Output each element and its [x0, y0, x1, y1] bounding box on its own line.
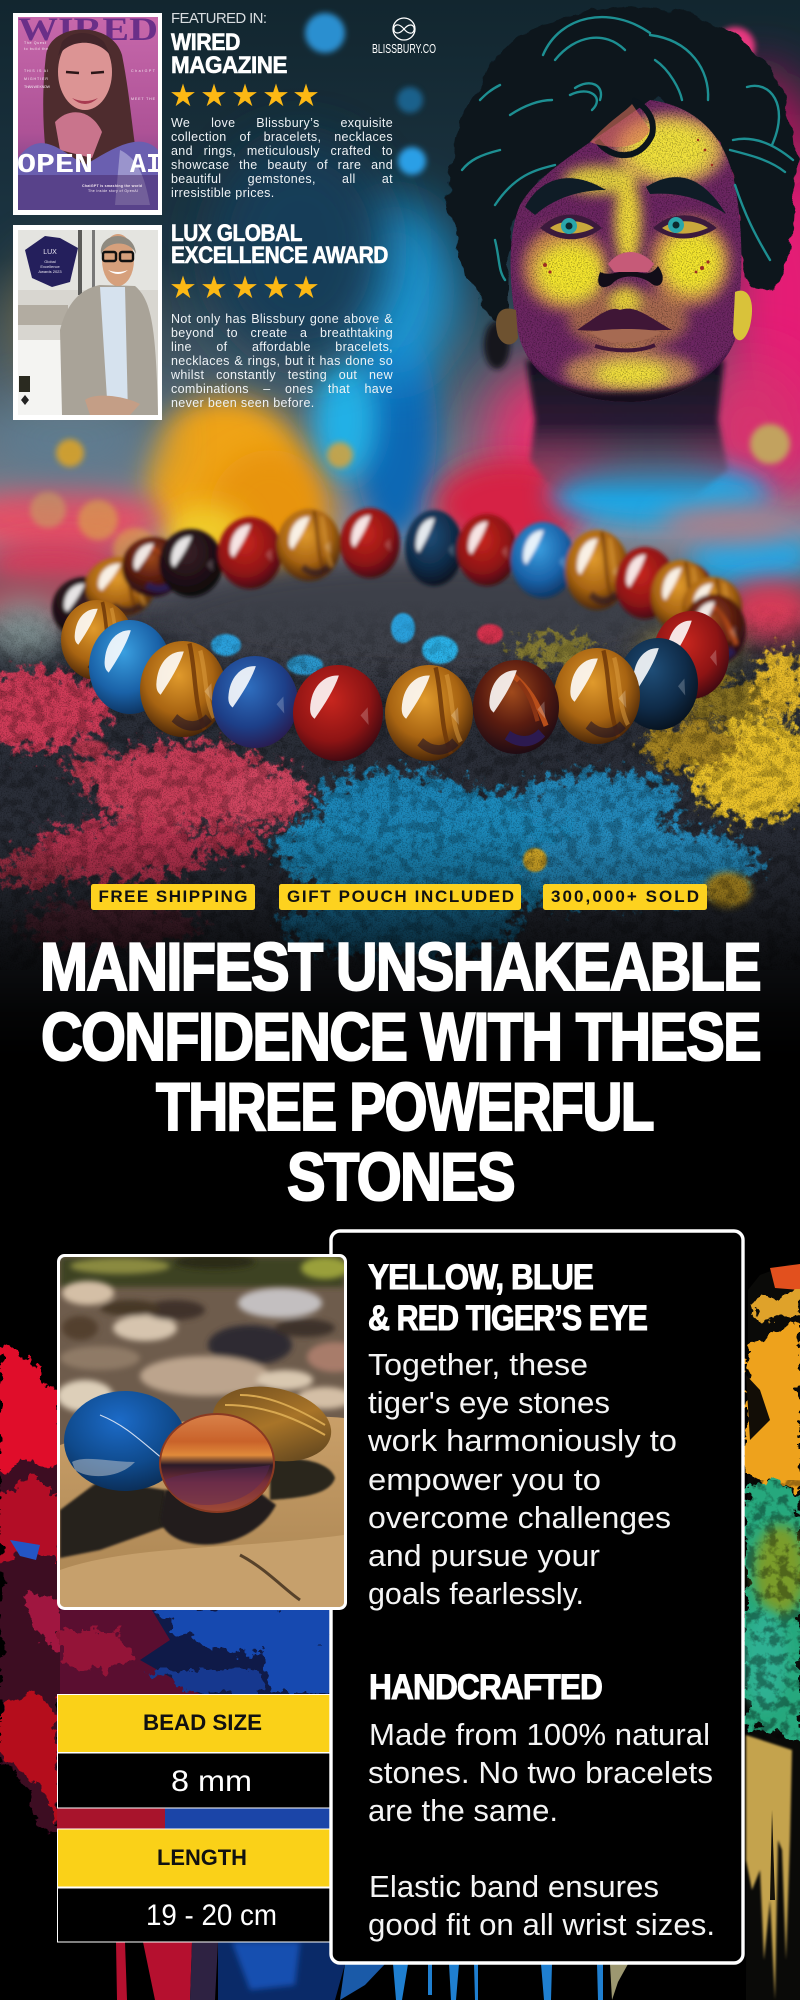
benefit tags — [91, 884, 707, 910]
tag: 300,000+ sold — [543, 884, 707, 910]
heading: wired magazine — [171, 29, 287, 79]
text: stones description: empower you to — [368, 1462, 601, 1497]
text: handcrafted description: stones. No two bracelets — [368, 1755, 713, 1790]
text: wired magazine review: showcase the beauty of rare and — [171, 158, 393, 172]
magazine cover: wired: WIRED — [18, 12, 158, 48]
text: handcrafted description: are the same. — [368, 1793, 558, 1828]
tag: gift pouch included: GIFT POUCH INCLUDED — [287, 887, 514, 906]
tag: gift pouch included — [279, 884, 521, 910]
logo: blissbury: BLISSBURY.CO — [372, 41, 436, 56]
neck — [526, 360, 728, 500]
magazine cover: wired: THIS IS AI — [24, 69, 48, 73]
bead size row: 8 mm — [171, 1765, 252, 1798]
freckles — [543, 139, 713, 274]
text: lux global review: combinations – ones that have — [171, 382, 393, 396]
bracelet beads, front row — [61, 600, 729, 761]
text: stones description: and pursue your — [368, 1538, 600, 1573]
text: wired magazine review: and rings, meticulously crafted to — [171, 144, 393, 158]
eyes — [540, 214, 602, 239]
text: lux global review: whilst constantly testing out new — [171, 368, 393, 382]
text: lux global review: necklaces & rings, but it has done so — [171, 354, 393, 368]
magazine cover: wired: THAN WE KNOW — [24, 85, 51, 89]
magazine cover: wired: ChatGPT is smashing the world — [82, 184, 142, 188]
coloured powder floor — [0, 512, 800, 968]
text: handcrafted description: Elastic band ensures — [369, 1869, 659, 1904]
bead size row: BEAD SIZE — [143, 1710, 262, 1735]
award photo: lux global: LUX — [43, 249, 57, 256]
teal hair strands — [462, 17, 793, 280]
text: handcrafted description: good fit on all wrist sizes. — [368, 1907, 715, 1942]
paint splash left — [0, 1350, 628, 2000]
spec table — [58, 1694, 332, 1942]
award photo: lux global: Excellence — [40, 264, 60, 269]
text: stones description: work harmoniously to — [367, 1423, 677, 1458]
heading: handcrafted: HANDCRAFTED — [369, 1668, 602, 1707]
paint splash right — [743, 1264, 800, 2000]
tag: free shipping: FREE SHIPPING — [98, 887, 248, 906]
portrait illustration — [448, 8, 795, 500]
heading: wired magazine: MAGAZINE — [171, 52, 287, 79]
heading: stones: YELLOW, BLUE — [368, 1258, 593, 1297]
icon: five stars — [171, 84, 318, 106]
face highlights — [505, 100, 745, 420]
length row — [58, 1829, 332, 1942]
length row: 19 - 20 cm — [146, 1899, 277, 1932]
jaw shadow — [529, 342, 734, 402]
featured in label: FEATURED IN: — [171, 10, 267, 27]
magazine cover: wired: MEET THE — [131, 97, 156, 101]
text: lux global review — [171, 312, 393, 410]
heading: lux global excellence award — [171, 220, 388, 269]
length row: LENGTH — [157, 1845, 247, 1870]
magazine cover: wired: OPEN — [17, 151, 93, 181]
brows — [525, 178, 606, 215]
heading: lux global excellence award: EXCELLENCE AWARD — [171, 242, 388, 269]
mouth — [577, 309, 672, 331]
shadows — [60, 1480, 170, 1558]
panel: description — [331, 1231, 743, 1963]
text: wired magazine review: beautiful gemstones, all at — [171, 172, 393, 186]
ears — [733, 291, 752, 340]
award photo: lux global: Global — [44, 259, 56, 264]
text: stones description: tiger's eye stones — [368, 1385, 610, 1420]
award photo: lux global: Awards 2023 — [38, 269, 62, 274]
text: stones description: Together, these — [368, 1347, 588, 1382]
text: handcrafted description — [368, 1717, 715, 1942]
hero scene: portrait, coloured powder and bracelet — [0, 0, 800, 1100]
magazine cover: wired: ChatGPT — [131, 69, 156, 73]
icon: five stars — [171, 276, 318, 298]
bead size row — [58, 1694, 332, 1808]
text: lux global review: Not only has Blissbury gone above & — [171, 312, 393, 326]
text: handcrafted description: Made from 100% natural — [369, 1717, 710, 1752]
text: stones description — [367, 1347, 677, 1611]
heading: lux global excellence award: LUX GLOBAL — [171, 220, 302, 247]
magazine cover: wired: MIGHTIER — [24, 77, 48, 81]
magazine cover: wired: AI — [130, 151, 162, 181]
logo: blissbury — [372, 18, 436, 56]
nose — [598, 266, 663, 287]
text: lux global review: beyond to create a breathtaking — [171, 326, 393, 340]
magazine cover: wired — [13, 12, 162, 215]
heading: stones — [368, 1258, 647, 1338]
blurred colour clouds behind the portrait — [0, 70, 800, 589]
heading: wired magazine: WIRED — [171, 29, 240, 56]
text: lux global review: line of affordable bracelets, — [171, 340, 393, 354]
heading: stones: & RED TIGER’S EYE — [368, 1299, 647, 1338]
text: wired magazine review: collection of bracelets, necklaces — [171, 130, 393, 144]
magazine cover: wired: The Quest — [24, 41, 46, 45]
magazine cover: wired: to build the — [24, 47, 48, 51]
text: wired magazine review — [171, 116, 393, 200]
bokeh dots — [30, 13, 790, 572]
hair mass — [448, 8, 795, 330]
photo: three tiger's eye stones on rock — [57, 1255, 363, 1608]
text: wired magazine review: We love Blissbury’s exquisite — [171, 116, 393, 130]
fade to black — [0, 825, 800, 1060]
text: wired magazine review: irresistible prices. — [171, 186, 275, 200]
tag: 300,000+ sold: 300,000+ SOLD — [551, 887, 699, 906]
face base — [511, 100, 741, 402]
text: lux global review: never been seen before. — [171, 396, 315, 410]
main title: THREE POWERFUL — [156, 1069, 653, 1145]
text: stones description: goals fearlessly. — [368, 1576, 584, 1611]
bracelet beads, back row — [52, 508, 746, 666]
tag: free shipping — [91, 884, 255, 910]
magazine cover: wired: The inside story of OpenAI — [88, 189, 138, 193]
award photo: lux global — [13, 225, 162, 420]
main title: STONES — [287, 1139, 514, 1215]
text: stones description: overcome challenges — [368, 1500, 671, 1535]
main title — [40, 929, 760, 1215]
hair fringe curl — [597, 100, 653, 155]
